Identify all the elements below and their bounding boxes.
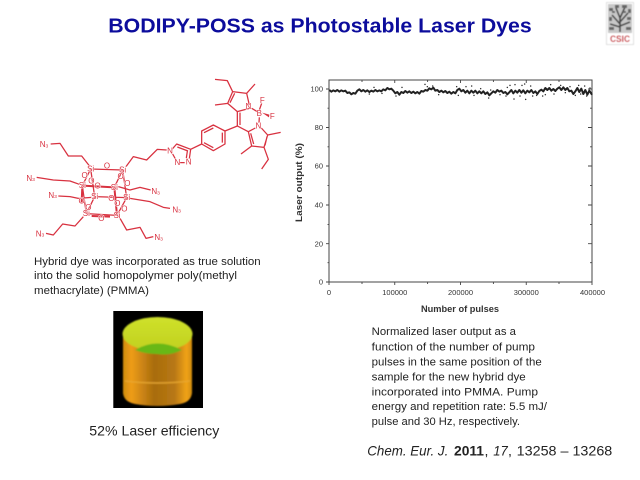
POSS silsesquioxane cage with azide arms: O [98,214,104,223]
BODIPY core, phenyl and triazole linker [167,79,281,169]
BODIPY core, phenyl and triazole linker: N [167,146,173,155]
POSS silsesquioxane cage with azide arms: O [88,176,94,185]
text block: chart caption: pulses in the same position of the [372,356,542,368]
POSS silsesquioxane cage with azide arms: N [172,205,178,214]
POSS silsesquioxane cage with azide arms: Si [123,193,130,202]
POSS silsesquioxane cage with azide arms: O [118,172,124,181]
POSS silsesquioxane cage with azide arms: N [48,191,54,200]
x axis labels: 0 [327,288,331,297]
citation: , [484,443,488,459]
data series near 100 percent [329,84,592,99]
text block: chart caption [372,326,548,428]
text block: chart caption: Normalized laser output as a [372,326,517,338]
y axis labels: 20 [315,239,323,248]
x axis labels: 100000 [382,288,407,297]
BODIPY core, phenyl and triazole linker: N [255,121,261,130]
POSS silsesquioxane cage with azide arms: 3 [54,194,57,200]
POSS silsesquioxane cage with azide arms: N [26,174,32,183]
x axis title: Number of pulses [421,304,499,314]
POSS silsesquioxane cage with azide arms: N [154,233,160,242]
citation [367,443,613,459]
POSS silsesquioxane cage with azide arms: Si [111,183,118,192]
text block: chart caption: function of the number of pump [372,341,535,353]
BODIPY core, phenyl and triazole linker: N [186,157,192,166]
POSS silsesquioxane cage with azide arms: O [79,196,85,205]
POSS silsesquioxane cage with azide arms: Si [113,211,121,220]
POSS silsesquioxane cage with azide arms: O [82,171,88,180]
POSS silsesquioxane cage with azide arms: O [121,204,127,213]
caption: laser efficiency: 52% Laser efficiency [89,423,219,439]
POSS silsesquioxane cage with azide arms: O [114,199,120,208]
text block: hybrid dye description: methacrylate) (PMMA) [34,285,149,297]
y axis labels [310,85,323,287]
text block: hybrid dye description: into the solid homopolymer poly(methyl [34,270,237,282]
citation: 17 [493,443,509,459]
title: BODIPY-POSS as Photostable Laser Dyes [108,14,532,37]
POSS silsesquioxane cage with azide arms: O [85,203,91,212]
POSS silsesquioxane cage with azide arms: N [36,229,41,238]
BODIPY core, phenyl and triazole linker: N [245,102,251,111]
chemical structure: BODIPY-POSS [26,79,281,242]
POSS silsesquioxane cage with azide arms: 3 [32,177,35,183]
y axis labels: 60 [315,162,323,171]
BODIPY core, phenyl and triazole linker: F [260,96,265,105]
POSS silsesquioxane cage with azide arms: Si [91,192,98,201]
POSS silsesquioxane cage with azide arms: Si [87,164,94,173]
text block: chart caption: energy and repetition rate: 5.5 mJ/ [372,401,548,413]
POSS silsesquioxane cage with azide arms: O [95,181,101,190]
x axis labels: 300000 [514,288,539,297]
y axis labels: 80 [315,123,323,132]
text block: chart caption: incorporated into PMMA. Pump [372,387,538,399]
x axis labels: 200000 [448,288,473,297]
text block: hybrid dye description: Hybrid dye was incorporated as true solution [34,256,261,268]
POSS silsesquioxane cage with azide arms: 3 [41,233,44,239]
BODIPY core, phenyl and triazole linker: F [270,112,275,121]
y axis labels: 40 [315,201,323,210]
text block: chart caption: sample for the new hybrid dye [372,371,526,383]
y axis labels: 0 [319,278,323,287]
citation: 13258 – 13268 [517,443,613,459]
photo: glowing dye-doped PMMA cylinder [113,311,203,408]
POSS silsesquioxane cage with azide arms: Si [79,181,86,190]
POSS silsesquioxane cage with azide arms: N [151,187,157,196]
POSS silsesquioxane cage with azide arms: O [104,161,110,170]
POSS silsesquioxane cage with azide arms: 3 [45,143,48,149]
POSS silsesquioxane cage with azide arms [26,140,181,242]
text block: hybrid dye description [34,256,261,297]
POSS silsesquioxane cage with azide arms: N [40,140,45,149]
icon: CSIC logo: CSIC [610,34,630,44]
y axis labels: 100 [310,85,323,94]
citation: , [508,443,512,459]
POSS silsesquioxane cage with azide arms: O [108,194,114,203]
text block: chart caption: pulse and 30 Hz, respectively. [372,416,520,428]
citation: Chem. Eur. J. [367,443,448,459]
citation: 2011 [454,443,484,459]
POSS silsesquioxane cage with azide arms: O [124,179,130,188]
POSS silsesquioxane cage with azide arms: 3 [157,190,160,196]
x axis labels [327,288,605,297]
POSS silsesquioxane cage with azide arms: Si [83,209,90,218]
POSS silsesquioxane cage with azide arms: Si [119,165,126,174]
x axis labels: 400000 [580,288,605,297]
y axis title: Laser output (%) [294,143,304,222]
POSS silsesquioxane cage with azide arms: 3 [178,209,181,215]
POSS silsesquioxane cage with azide arms: 3 [160,236,163,242]
icon: CSIC logo [606,2,634,44]
BODIPY core, phenyl and triazole linker: N [174,158,180,167]
scatter chart: laser output vs number of pulses [294,80,605,314]
BODIPY core, phenyl and triazole linker: B [257,109,262,118]
plot frame and ticks [326,80,592,285]
